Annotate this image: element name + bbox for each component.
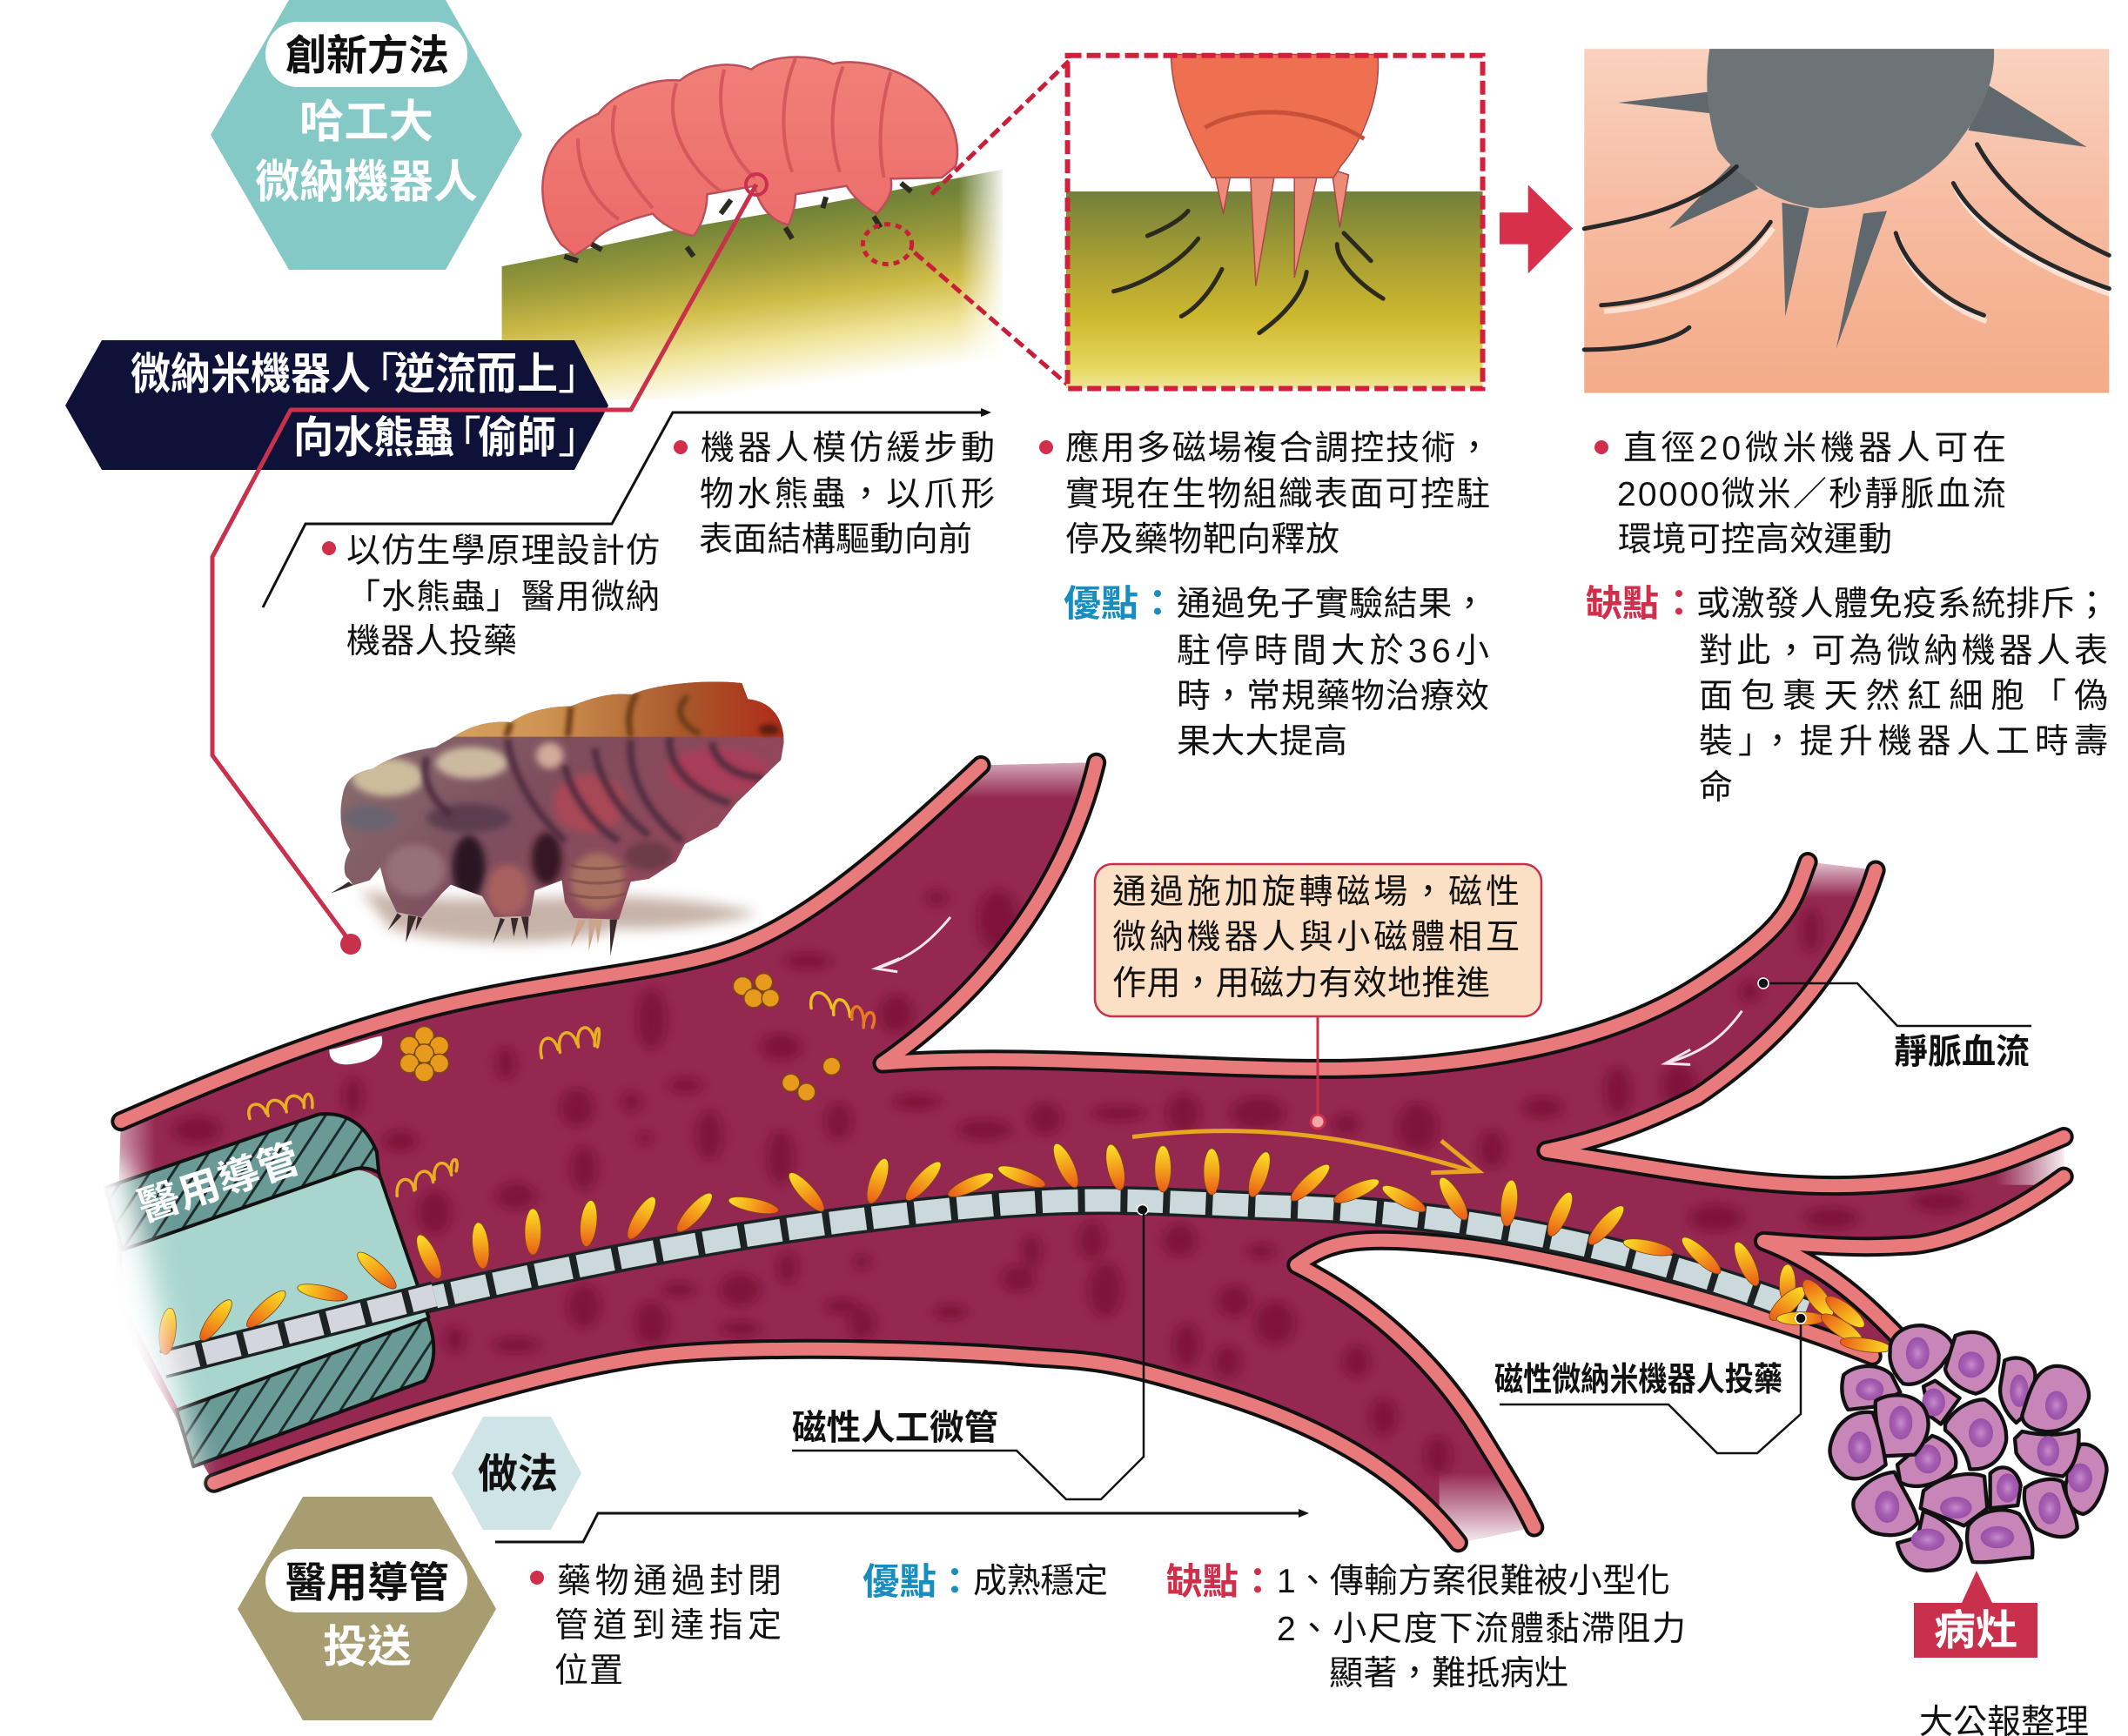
banner line two phrase: 偷師 bbox=[478, 413, 556, 462]
heading label: 醫用導管 bbox=[285, 1560, 449, 1606]
banner line one: 微納米機器人 bbox=[131, 350, 371, 399]
pointer ring bbox=[1311, 1115, 1325, 1129]
lower callout arrow head bbox=[1299, 1509, 1309, 1518]
illustration: brown tardigrade bbox=[331, 682, 784, 955]
tube inside catheter bbox=[163, 1296, 434, 1364]
flow arrow left bbox=[876, 917, 950, 972]
catheter label: 醫用導管 bbox=[132, 1136, 305, 1230]
heading subject line: 微納機器人 bbox=[255, 158, 478, 208]
colon: ： bbox=[1661, 583, 1697, 624]
banner line two quote: 「 bbox=[438, 413, 481, 462]
blood flow arrows bbox=[876, 917, 1742, 1064]
text block: tardigrade mimicry bbox=[674, 430, 995, 559]
lower body tone bbox=[341, 682, 784, 919]
close-up skin bbox=[1584, 49, 2109, 393]
line 3: 時，常規藥物治療效 bbox=[1177, 678, 1489, 715]
line 1: 或激發人體免疫系統排斥； bbox=[1696, 586, 2109, 623]
upper folds bbox=[507, 694, 779, 737]
text block: multi magnetic field bbox=[1039, 430, 1491, 559]
navy title banner bbox=[65, 340, 608, 470]
body folds bbox=[426, 737, 763, 841]
catheter inner bbox=[122, 1170, 429, 1409]
label: magnetic micro robot delivery bbox=[1494, 1313, 1806, 1453]
callout: rotating magnetic field bbox=[1095, 864, 1541, 1129]
text block: 20 micron robot bbox=[1594, 430, 2006, 559]
back layer cells bbox=[1842, 1358, 2106, 1525]
blood cells bbox=[173, 889, 1967, 1475]
right side pictures bbox=[1066, 49, 2111, 393]
label text: 磁性微納米機器人投藥 bbox=[1494, 1362, 1782, 1398]
robots in catheter bbox=[157, 1249, 401, 1355]
heading sub: 投送 bbox=[323, 1622, 412, 1672]
heading org: 哈工大 bbox=[299, 97, 433, 148]
microrobot close-up bbox=[1584, 49, 2111, 393]
inset hairs bbox=[1113, 211, 1383, 333]
catheter bottom band bbox=[177, 1318, 433, 1466]
lesion text: 病灶 bbox=[1934, 1608, 2017, 1654]
tardigrade body bbox=[341, 682, 784, 919]
colon: ： bbox=[936, 1561, 973, 1602]
line 2: 對此，可為微納機器人表 bbox=[1699, 633, 2108, 670]
line 3: 作用，用磁力有效地推進 bbox=[1112, 965, 1490, 1002]
banner line two: 向水熊蟲 bbox=[293, 413, 454, 462]
ground right fade bbox=[959, 161, 1006, 406]
upper body band bbox=[331, 679, 802, 737]
banner line two close: 」 bbox=[558, 413, 601, 462]
text block: catheter advantage bbox=[863, 1561, 1108, 1602]
label: magnetic tube bbox=[792, 1210, 1144, 1499]
heading hexagon: innovation method bbox=[211, 0, 522, 270]
body shading bbox=[343, 742, 769, 916]
dark claws bbox=[331, 881, 617, 955]
vessel walls bbox=[121, 762, 2064, 1543]
blood vessel illustration bbox=[34, 727, 2105, 1565]
heading hexagon: catheter delivery bbox=[238, 1497, 496, 1720]
arrow to microrobot bbox=[1500, 184, 1573, 273]
colon: ： bbox=[1139, 583, 1176, 624]
dashed zoom lines bbox=[915, 61, 1069, 385]
label: venous blood flow bbox=[1758, 978, 2031, 1071]
colon: ： bbox=[1239, 1561, 1276, 1602]
callout arrow head bbox=[981, 408, 991, 417]
text block: advantage bbox=[1064, 583, 1489, 761]
leader dot on tube bbox=[1137, 1205, 1148, 1215]
method text: 做法 bbox=[478, 1451, 558, 1497]
wall outlines bbox=[121, 762, 2064, 1543]
zoom inset: tardigrade foot bbox=[1066, 55, 1483, 388]
ground shadow bbox=[360, 890, 757, 942]
white particle bbox=[329, 1036, 382, 1064]
pale claws bbox=[571, 918, 602, 951]
flow arrow right bbox=[1665, 1011, 1742, 1064]
line 2: 20000微米／秒靜脈血流 bbox=[1617, 476, 2006, 513]
heading label: 創新方法 bbox=[285, 33, 449, 79]
label text: 磁性人工微管 bbox=[792, 1409, 998, 1447]
line 1: 藥物通過封閉 bbox=[557, 1563, 782, 1600]
vessel interior bbox=[68, 727, 2105, 1565]
hairs bbox=[1584, 144, 2109, 350]
line 2: 物水熊蟲，以爪形 bbox=[700, 476, 995, 513]
line 2: 駐停時間大於36小 bbox=[1177, 633, 1489, 670]
sphere bbox=[1707, 49, 1994, 208]
red leader line from tardigrade bbox=[212, 174, 767, 955]
wall pink fill bbox=[121, 762, 2064, 1543]
text block: catheter disadvantage bbox=[1166, 1561, 1686, 1692]
inset dashed frame bbox=[1068, 56, 1483, 388]
tumour lesion bbox=[1829, 1325, 2106, 1571]
ground surface bbox=[502, 170, 1003, 399]
text block: catheter method bbox=[530, 1563, 782, 1690]
inset legs bbox=[1212, 161, 1348, 285]
text block: catheter advantage: 優點 bbox=[863, 1561, 936, 1602]
line 3: 停及藥物靶向釋放 bbox=[1065, 521, 1339, 559]
line 3: 表面結構驅動向前 bbox=[699, 521, 972, 559]
catheter left fade bbox=[34, 1163, 197, 1483]
dashed zoom target bbox=[863, 225, 912, 265]
leg rings bbox=[567, 864, 631, 898]
inset foot body bbox=[1171, 55, 1378, 178]
inset soil bbox=[1066, 191, 1483, 388]
line 2: 2、小尺度下流體黏滯阻力 bbox=[1277, 1611, 1686, 1648]
line 3: 面包裹天然紅細胞「偽 bbox=[1699, 678, 2108, 715]
text block: advantage: 優點 bbox=[1064, 583, 1138, 624]
text block: disadvantage: 缺點 bbox=[1586, 583, 1659, 624]
catheter right edge bbox=[379, 1173, 429, 1318]
line 5: 命 bbox=[1699, 769, 1733, 807]
line 2: 「水熊蟲」醫用微納 bbox=[346, 579, 660, 616]
text block: catheter disadvantage: 缺點 bbox=[1166, 1561, 1239, 1602]
line 2: 微納機器人與小磁體相互 bbox=[1112, 919, 1520, 956]
line 3: 位置 bbox=[554, 1652, 623, 1690]
vessel blood fill bbox=[68, 727, 2105, 1565]
line 4: 裝」，提升機器人工時壽 bbox=[1699, 723, 2108, 761]
line 3: 環境可控高效運動 bbox=[1618, 521, 1892, 559]
line 1: 通過施加旋轉磁場，磁性 bbox=[1112, 874, 1520, 911]
tardigrade segments and claws bbox=[564, 58, 911, 261]
line 1: 通過免子實驗結果， bbox=[1177, 586, 1487, 623]
line 2: 管道到達指定 bbox=[554, 1607, 782, 1645]
gold particle clusters bbox=[399, 974, 841, 1101]
banner line one close: 」 bbox=[558, 350, 601, 399]
line 1: 機器人模仿緩步動 bbox=[701, 430, 995, 467]
pointer bbox=[1316, 1016, 1319, 1115]
text block: disadvantage bbox=[1586, 583, 2109, 807]
hair highlights bbox=[1604, 189, 2111, 321]
line 3: 機器人投藥 bbox=[346, 623, 517, 660]
pink tardigrade body bbox=[542, 57, 957, 255]
method hexagon bbox=[452, 1417, 581, 1530]
line 2: 實現在生物組織表面可控駐 bbox=[1065, 476, 1490, 513]
magnetic micro-tube bbox=[163, 1200, 1806, 1364]
catheter bbox=[34, 1114, 434, 1483]
catheter top band bbox=[105, 1114, 379, 1250]
value: 成熟穩定 bbox=[973, 1563, 1108, 1600]
line 3: 顯著，難抵病灶 bbox=[1329, 1655, 1568, 1692]
lesion label bbox=[1914, 1571, 2037, 1658]
inset fold bbox=[1205, 112, 1364, 138]
text block: biomimetic design bbox=[322, 533, 660, 660]
squiggle bacteria bbox=[249, 993, 874, 1196]
line 4: 果大大提高 bbox=[1177, 723, 1347, 761]
banner line one quote: 「 bbox=[355, 350, 399, 399]
black callout line bbox=[263, 412, 988, 607]
line 1: 以仿生學原理設計仿 bbox=[346, 533, 660, 570]
line 1: 應用多磁場複合調控技術， bbox=[1065, 430, 1491, 467]
spikes bbox=[1618, 84, 2087, 349]
line 1: 1、傳輸方案很難被小型化 bbox=[1277, 1563, 1670, 1600]
magnetic force arrow bbox=[1132, 1131, 1479, 1173]
illustration: pink tardigrade on surface bbox=[502, 49, 2111, 406]
front layer cells bbox=[1829, 1325, 2089, 1571]
line 1: 直徑20微米機器人可在 bbox=[1623, 430, 2006, 467]
tip fades bbox=[964, 738, 1127, 799]
banner line one phrase: 逆流而上 bbox=[394, 350, 558, 399]
magnetic microrobots on tube bbox=[412, 1142, 1892, 1355]
label text: 靜脈血流 bbox=[1894, 1033, 2030, 1071]
lower callout line bbox=[495, 1513, 1303, 1542]
